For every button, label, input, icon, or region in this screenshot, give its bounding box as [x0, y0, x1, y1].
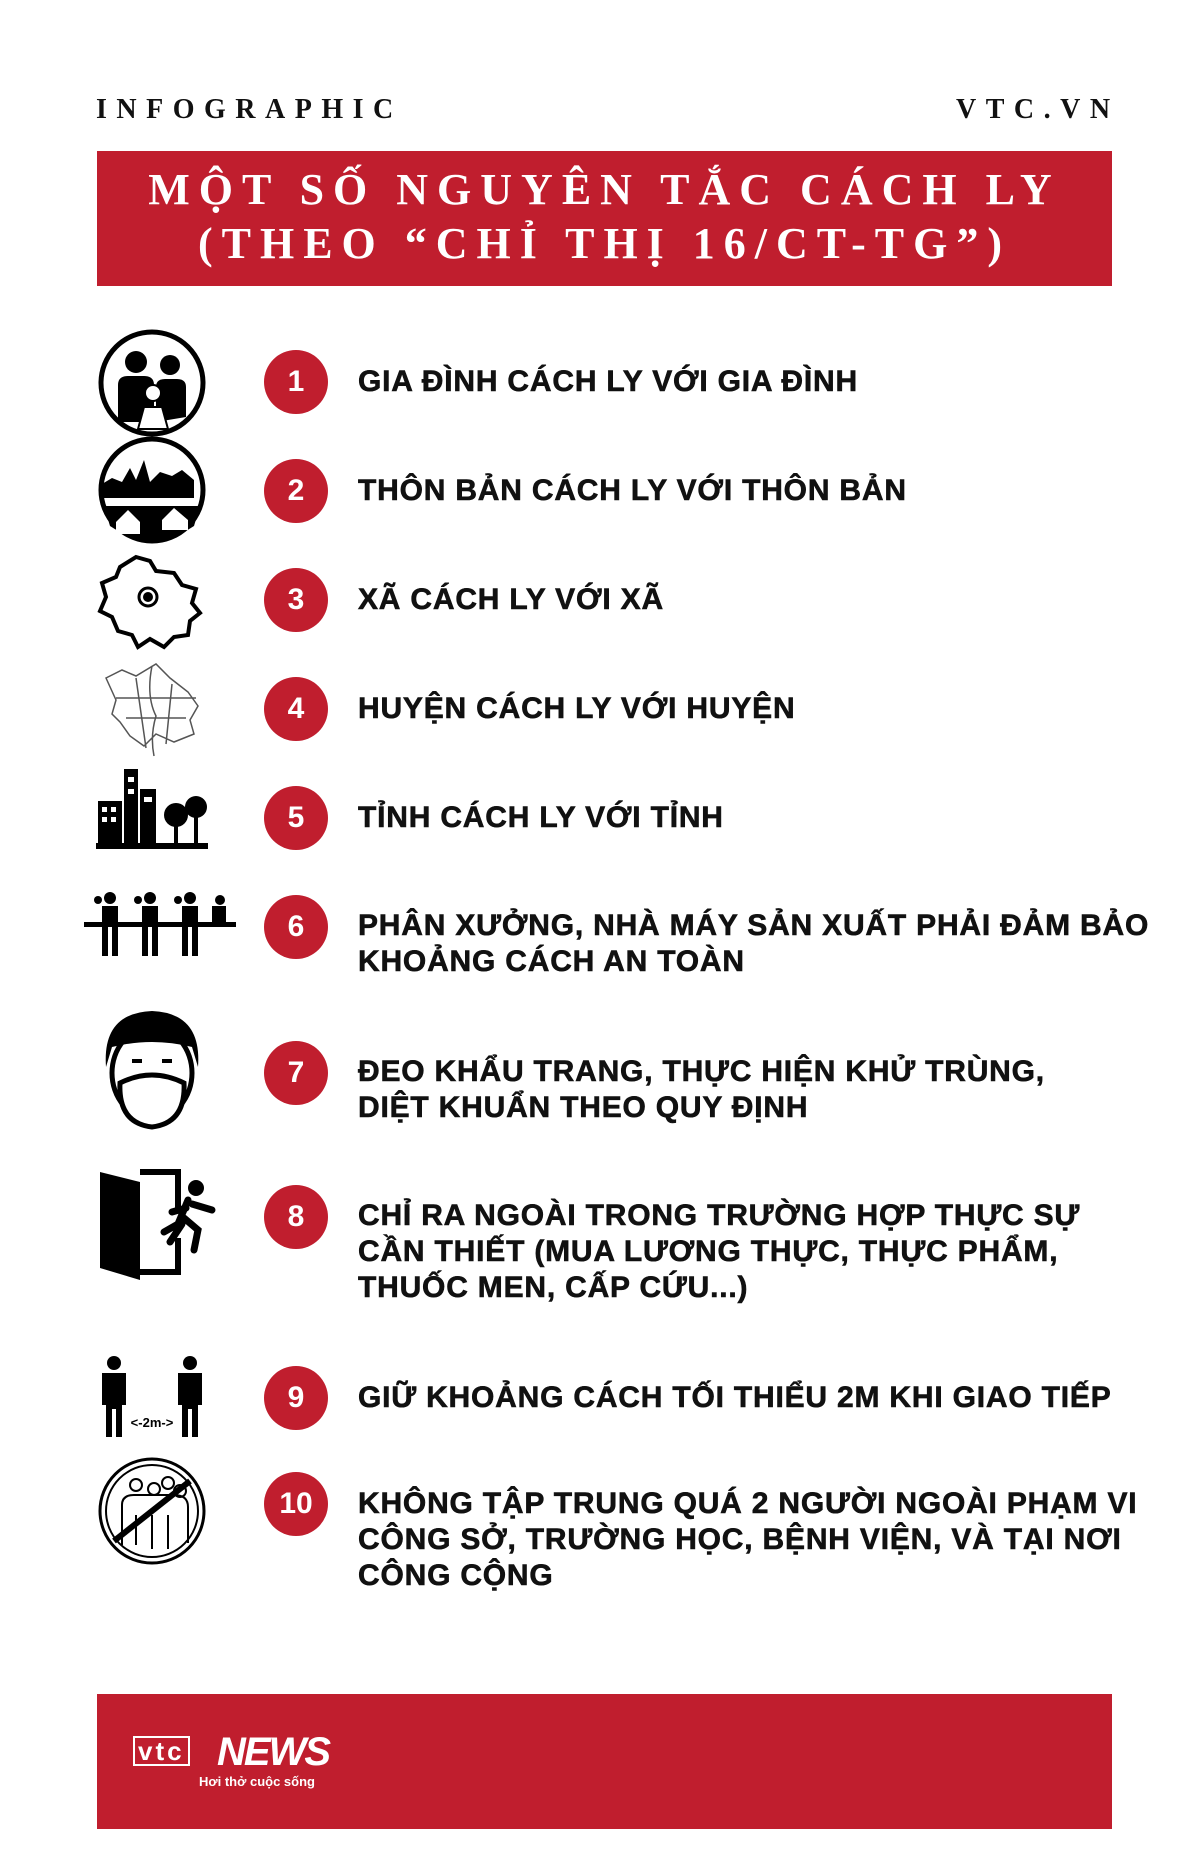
number 7: 7 [288, 1056, 304, 1089]
text 10 [358, 1486, 1137, 1592]
text 10: CÔNG SỞ, TRƯỜNG HỌC, BỆNH VIỆN, VÀ TẠI NƠI [358, 1523, 1122, 1556]
icon: mask face [106, 1011, 198, 1130]
number 4 [264, 677, 328, 741]
number 8: 8 [288, 1200, 304, 1233]
number 10 [264, 1472, 328, 1536]
icon: village [98, 436, 206, 544]
number 7 [264, 1041, 328, 1105]
item 7 [106, 1011, 1045, 1130]
text 10: KHÔNG TẬP TRUNG QUÁ 2 NGƯỜI NGOÀI PHẠM VI [358, 1487, 1137, 1520]
logo: VTC NEWS [133, 1730, 331, 1789]
logo: VTC NEWS: vtc [138, 1736, 185, 1766]
item 1 [98, 330, 858, 436]
text 8: CHỈ RA NGOÀI TRONG TRƯỜNG HỢP THỰC SỰ [358, 1199, 1080, 1232]
header right: VTC.VN [956, 94, 1120, 125]
item 9 [102, 1356, 1112, 1437]
number 3: 3 [288, 583, 304, 616]
icon: commune map [98, 554, 203, 650]
logo: VTC NEWS: NEWS [217, 1730, 329, 1774]
icon: distance 2m [102, 1356, 202, 1437]
title banner: (THEO “CHỈ THỊ 16/CT-TG”) [198, 219, 1011, 268]
text 9: GIỮ KHOẢNG CÁCH TỐI THIỂU 2M KHI GIAO TIẾP [358, 1381, 1112, 1414]
text 7: ĐEO KHẨU TRANG, THỰC HIỆN KHỬ TRÙNG, [358, 1055, 1045, 1088]
item 8 [100, 1169, 1080, 1304]
icon: city [96, 769, 208, 849]
number 8 [264, 1185, 328, 1249]
item 3 [98, 554, 664, 650]
item 10 [98, 1458, 1137, 1592]
number 4: 4 [288, 692, 304, 725]
text 7: DIỆT KHUẨN THEO QUY ĐỊNH [358, 1091, 808, 1124]
number 1 [264, 350, 328, 414]
logo: VTC NEWS: Hơi thở cuộc sống [199, 1774, 315, 1789]
item 2 [98, 436, 907, 544]
number 3 [264, 568, 328, 632]
text 2: THÔN BẢN CÁCH LY VỚI THÔN BẢN [358, 474, 907, 507]
title banner [97, 151, 1112, 286]
number 2: 2 [288, 474, 304, 507]
text 8: THUỐC MEN, CẤP CỨU...) [358, 1271, 748, 1304]
text 8 [358, 1198, 1080, 1304]
number 6: 6 [288, 910, 304, 943]
text 1: GIA ĐÌNH CÁCH LY VỚI GIA ĐÌNH [358, 365, 858, 398]
item 4 [105, 663, 795, 756]
icon: distance 2m: <-2m-> [131, 1415, 174, 1430]
icon: workers [84, 892, 236, 956]
title banner: MỘT SỐ NGUYÊN TẮC CÁCH LY [148, 165, 1061, 214]
number 10: 10 [279, 1487, 313, 1520]
text 3: XÃ CÁCH LY VỚI XÃ [358, 583, 664, 616]
header left: INFOGRAPHIC [96, 94, 403, 125]
text 6: KHOẢNG CÁCH AN TOÀN [358, 945, 745, 978]
text 5: TỈNH CÁCH LY VỚI TỈNH [358, 801, 724, 834]
text 8: CẦN THIẾT (MUA LƯƠNG THỰC, THỰC PHẨM, [358, 1235, 1058, 1268]
icon: no gathering [98, 1458, 206, 1564]
number 5 [264, 786, 328, 850]
number 9: 9 [288, 1381, 304, 1414]
footer banner [97, 1694, 1112, 1829]
text 6: PHÂN XƯỞNG, NHÀ MÁY SẢN XUẤT PHẢI ĐẢM BẢO [358, 909, 1149, 942]
text 6 [358, 908, 1149, 978]
icon: exit [100, 1169, 216, 1280]
number 5: 5 [288, 801, 304, 834]
text 7 [358, 1054, 1045, 1124]
icon: family [98, 330, 206, 436]
item 5 [96, 769, 724, 850]
number 9 [264, 1366, 328, 1430]
number 2 [264, 459, 328, 523]
number 1: 1 [288, 365, 304, 398]
item 6 [84, 892, 1149, 978]
text 10: CÔNG CỘNG [358, 1559, 554, 1592]
icon: district map [105, 663, 199, 756]
number 6 [264, 895, 328, 959]
text 4: HUYỆN CÁCH LY VỚI HUYỆN [358, 692, 795, 725]
